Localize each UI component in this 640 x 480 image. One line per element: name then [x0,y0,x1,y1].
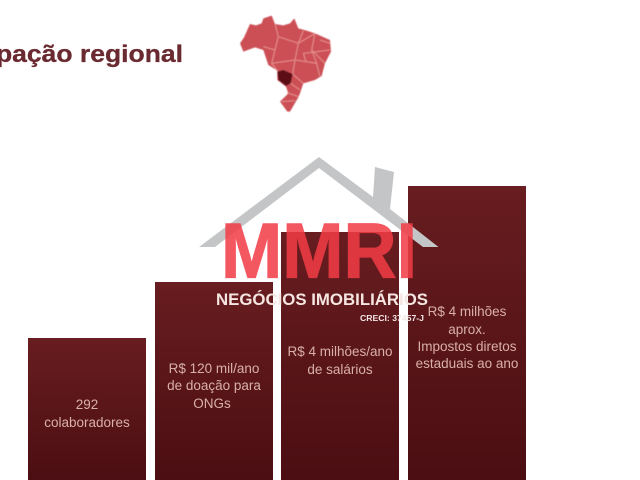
bar: R$ 120 mil/ano de doação para ONGs: ONGs [193,396,231,411]
bar: R$ 4 milhões aprox. impostos diretos estaduais ao ano [408,186,526,480]
bar: 292 colaboradores: 292 [76,397,98,412]
bar: R$ 4 milhões aprox. impostos diretos estaduais ao ano: estaduais ao ano [416,356,518,371]
bar: R$ 4 milhões/ano de salários: R$ 4 milhões/ano [287,344,393,359]
bar: R$ 120 mil/ano de doação para ONGs: de doação para [167,378,261,393]
bar chart [28,186,526,480]
bar: R$ 120 mil/ano de doação para ONGs: R$ 120 mil/ano [169,361,259,376]
bar: 292 colaboradores [28,338,146,480]
bar: 292 colaboradores: colaboradores [44,415,130,430]
icon: house roof and chimney [199,157,438,247]
bar: R$ 4 milhões aprox. impostos diretos estaduais ao ano: aprox. [448,322,486,337]
logo wordmark: MMRI: MMRI [221,206,417,294]
logo tagline: negócios imobiliários: NEGÓCIOS IMOBILIÁRIOS [216,290,428,309]
bar: R$ 4 milhões/ano de salários: de salários [307,362,373,377]
watermark logo [199,157,438,323]
icon: map of Brazil with highlighted state [240,16,331,112]
highlighted state: Mato Grosso do Sul [277,70,293,86]
bar: R$ 120 mil/ano de doação para ONGs [155,282,273,480]
logo registration: CRECI: CRECI: 37457-J [360,314,424,323]
bar: R$ 4 milhões aprox. impostos diretos estaduais ao ano: R$ 4 milhões [428,304,507,319]
bar: R$ 4 milhões aprox. impostos diretos estaduais ao ano: Impostos diretos [417,339,517,354]
title: participação regional: pação regional [0,41,183,68]
bar: R$ 4 milhões/ano de salários [281,232,399,480]
